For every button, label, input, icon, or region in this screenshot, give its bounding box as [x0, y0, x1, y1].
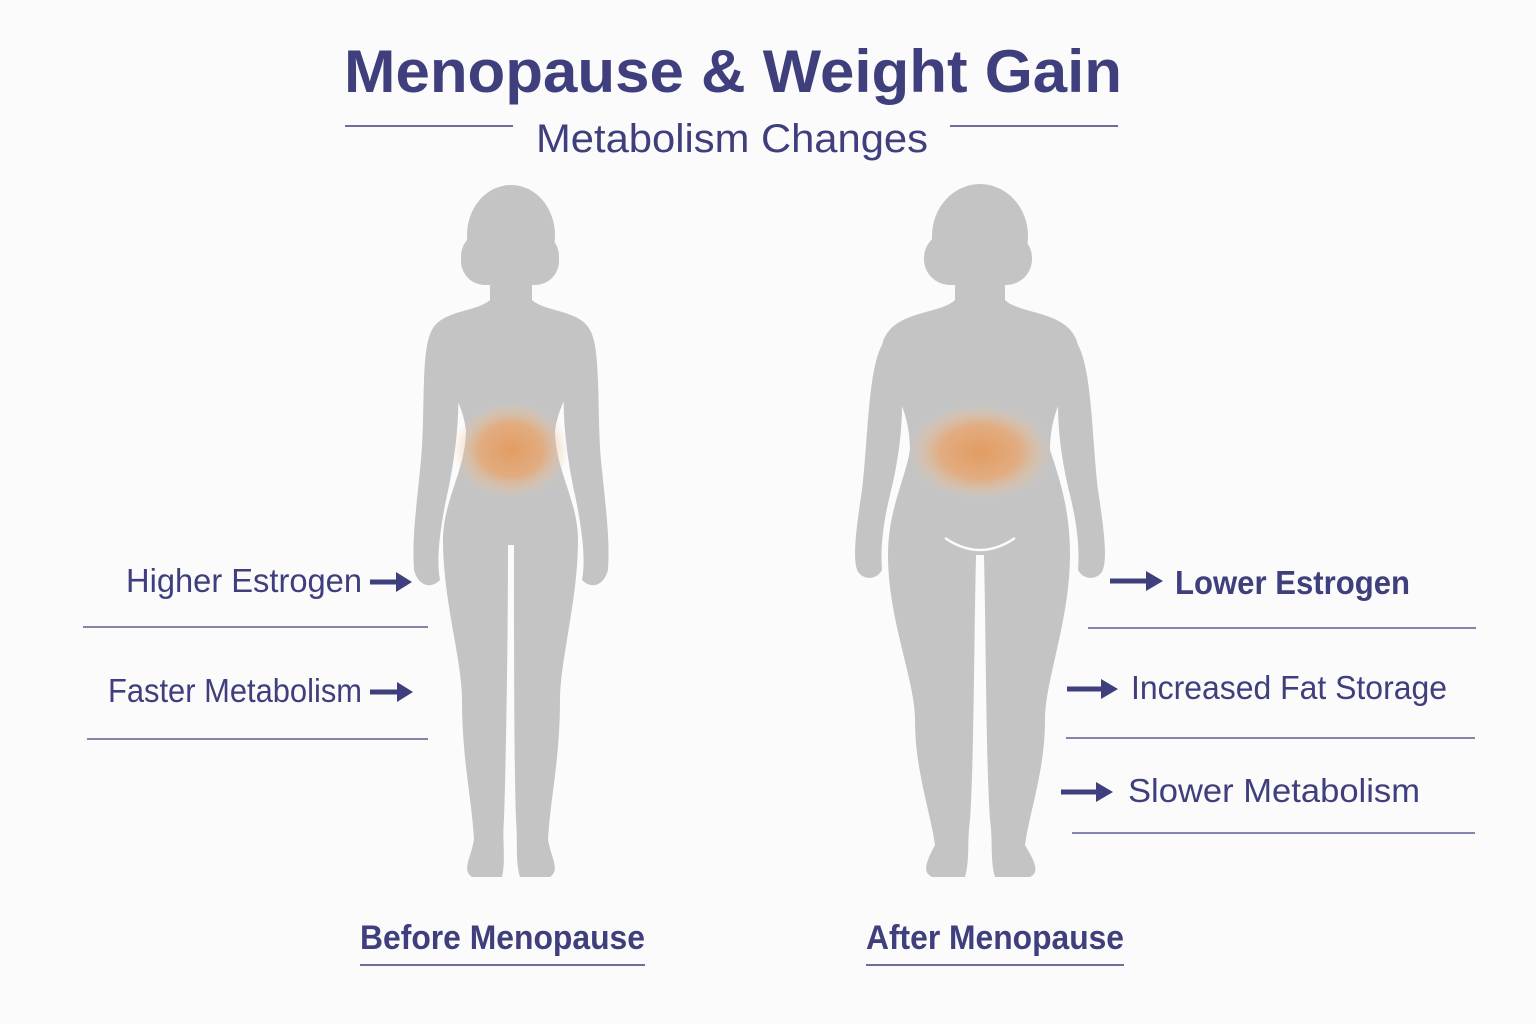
label: faster metabolism: Faster Metabolism	[108, 672, 362, 709]
label: faster metabolism	[87, 672, 428, 739]
caption: before menopause: Before Menopause	[360, 919, 645, 957]
label: slower metabolism: Slower Metabolism	[1128, 772, 1420, 809]
label: higher estrogen	[83, 562, 428, 627]
label: lower estrogen: Lower Estrogen	[1175, 564, 1410, 601]
label: increased fat storage	[1066, 669, 1475, 738]
label: increased fat storage: Increased Fat Storage	[1131, 669, 1447, 706]
figure: before menopause	[413, 185, 609, 877]
figure: after menopause	[855, 184, 1105, 877]
subtitle: Metabolism Changes	[536, 117, 928, 161]
title: Menopause & Weight Gain	[344, 38, 1122, 105]
label: higher estrogen: Higher Estrogen	[126, 562, 362, 599]
label: lower estrogen	[1088, 564, 1476, 628]
caption: after menopause: After Menopause	[866, 919, 1124, 957]
label: slower metabolism	[1061, 772, 1475, 833]
highlight: belly glow	[908, 404, 1052, 500]
highlight: belly glow	[453, 402, 569, 498]
